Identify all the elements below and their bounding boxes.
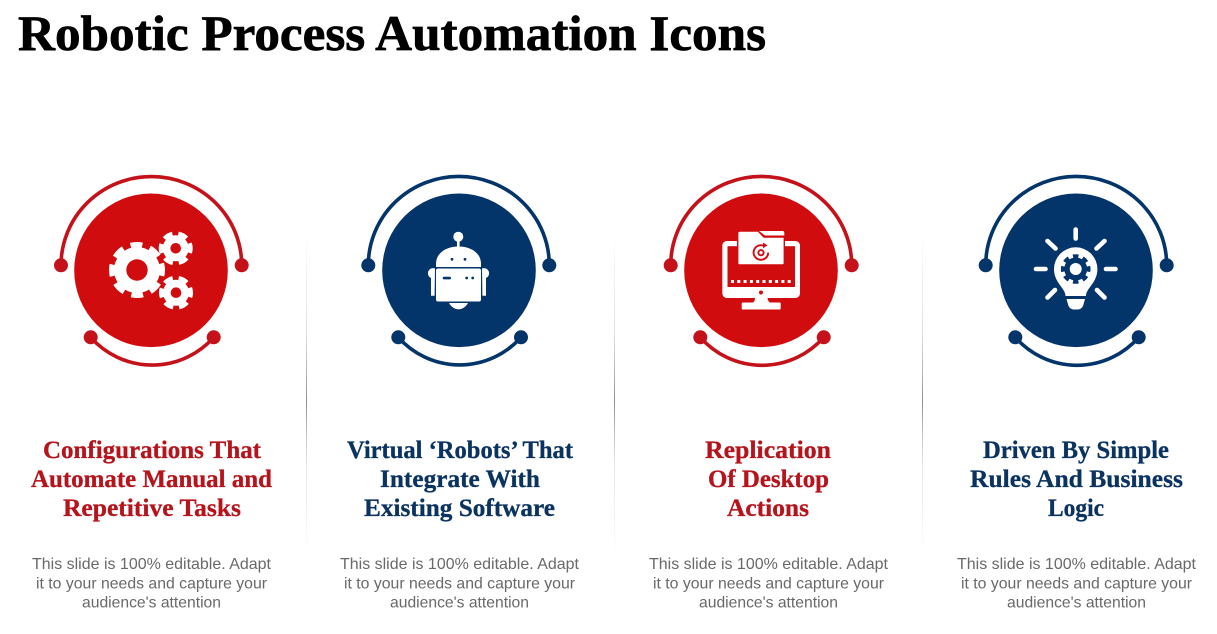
- icon: robot in navy circle with arcs: [361, 176, 556, 365]
- icon: monitor with folder in red circle with arcs: [664, 176, 859, 365]
- heading: virtual robots: [347, 437, 574, 522]
- heading: virtual robots: Existing Software: [364, 495, 555, 522]
- heading: configurations: Automate Manual and: [31, 466, 272, 493]
- heading: driven by rules: Logic: [1048, 495, 1104, 522]
- text block: replication: it to your needs and capture your: [653, 576, 885, 592]
- text block: configurations: [32, 556, 272, 612]
- heading: replication: Actions: [727, 495, 809, 522]
- text block: configurations: it to your needs and capture your: [36, 576, 268, 592]
- text block: virtual robots: audience's attention: [390, 594, 529, 612]
- text block: virtual robots: [340, 556, 580, 612]
- heading: replication: Of Desktop: [708, 466, 829, 493]
- heading: configurations: [31, 437, 272, 522]
- text block: driven by rules: This slide is 100% editable. Adapt: [957, 556, 1197, 573]
- panel: replication: [649, 176, 889, 611]
- heading: driven by rules: Rules And Business: [970, 466, 1183, 493]
- text block: driven by rules: audience's attention: [1007, 594, 1146, 612]
- heading: virtual robots: Integrate With: [380, 466, 540, 493]
- heading: replication: Replication: [705, 437, 831, 464]
- heading: configurations: Configurations That: [43, 437, 262, 464]
- text block: virtual robots: it to your needs and capture your: [344, 576, 576, 592]
- heading: replication: [705, 437, 831, 522]
- text block: replication: [649, 556, 889, 612]
- text block: configurations: audience's attention: [82, 594, 221, 612]
- heading: driven by rules: [970, 437, 1183, 522]
- panel: driven by rules: [957, 176, 1197, 612]
- text block: driven by rules: [957, 556, 1197, 612]
- icon: gears in red circle with arcs: [54, 177, 249, 365]
- text block: virtual robots: This slide is 100% editable. Adapt: [340, 556, 580, 573]
- panel: virtual robots: [340, 176, 580, 611]
- text block: configurations: This slide is 100% editable. Adapt: [32, 556, 272, 573]
- heading: configurations: Repetitive Tasks: [63, 495, 241, 522]
- icon: light bulb with gear in navy circle with arcs: [979, 176, 1174, 365]
- text block: driven by rules: it to your needs and capture your: [961, 576, 1193, 592]
- heading: driven by rules: Driven By Simple: [983, 437, 1169, 464]
- text block: replication: audience's attention: [699, 594, 838, 612]
- text block: replication: This slide is 100% editable. Adapt: [649, 556, 889, 573]
- heading: virtual robots: Virtual ‘Robots’ That: [347, 437, 574, 464]
- title: Robotic Process Automation Icons: [18, 5, 766, 61]
- panel: configurations: [31, 177, 272, 612]
